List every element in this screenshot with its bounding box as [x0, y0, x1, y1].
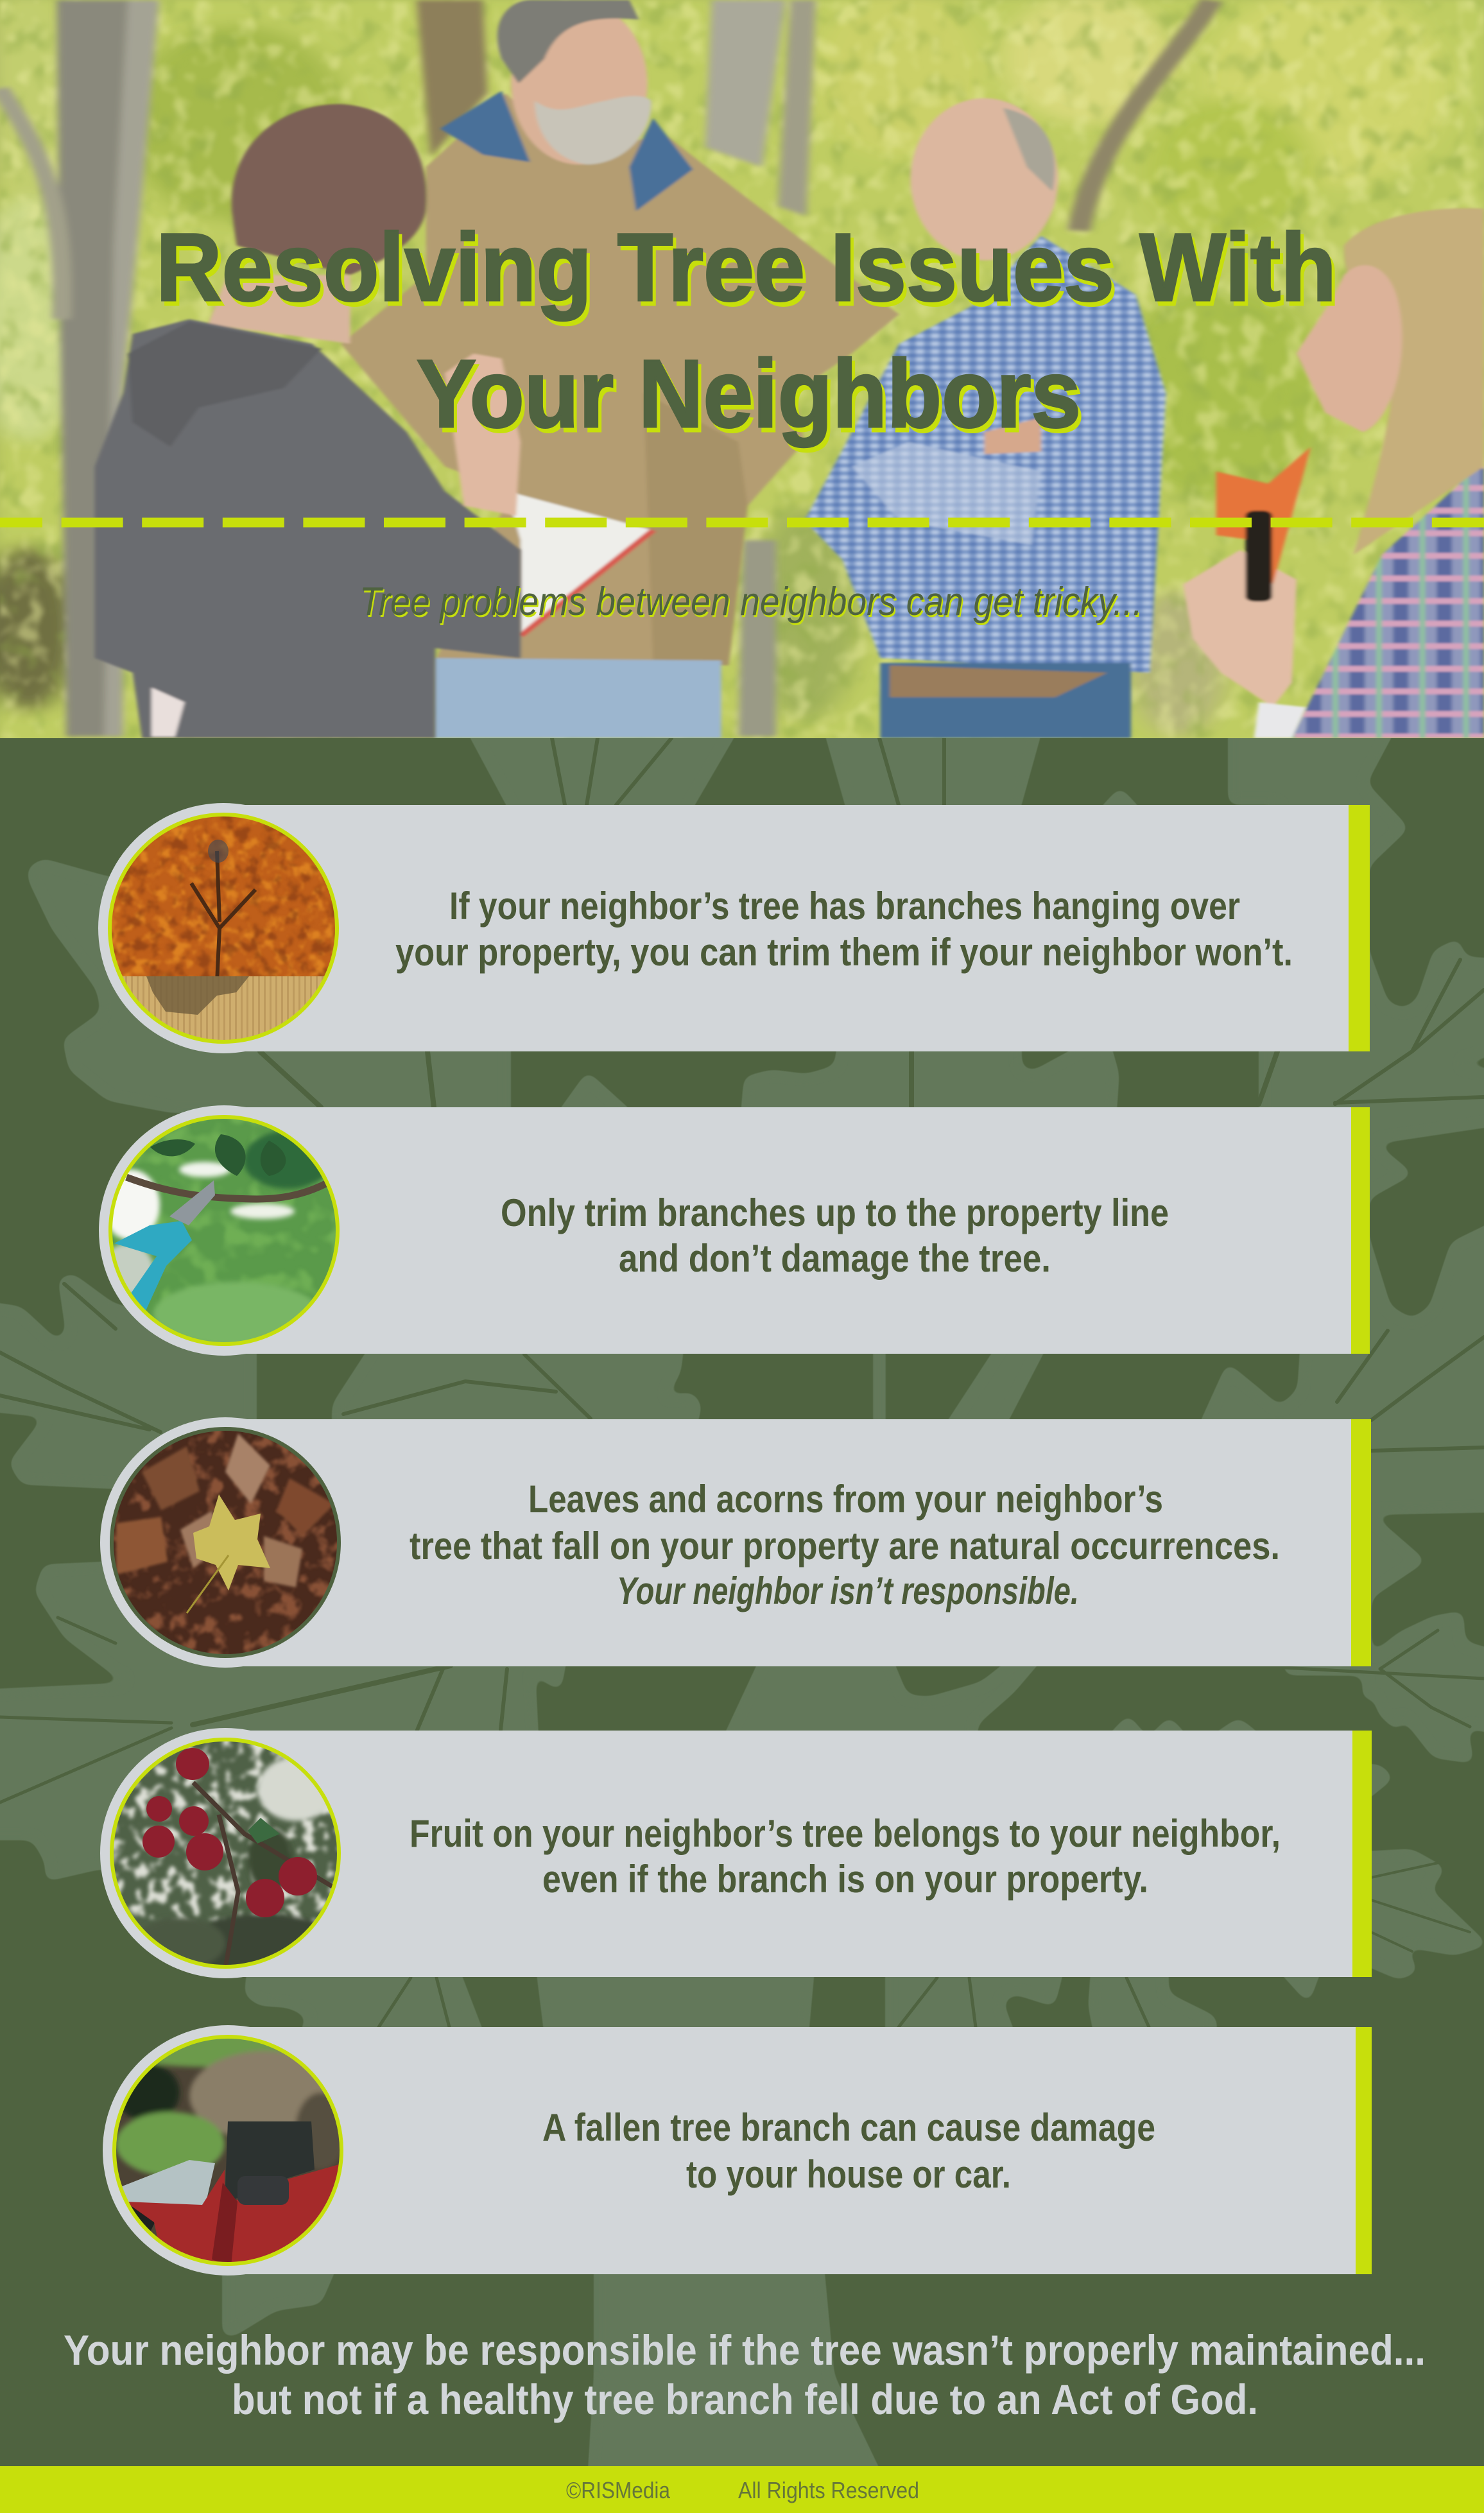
text: card 3: Your neighbor isn’t responsible. [617, 1569, 1079, 1612]
text: card 5: A fallen tree branch can cause damage [542, 2106, 1155, 2149]
title: Your Neighbors [417, 340, 1081, 447]
footer bar [0, 2466, 1484, 2513]
woman with plaid shirt and device [1183, 208, 1484, 738]
text: card 2: and don’t damage the tree. [619, 1237, 1051, 1280]
card 5: fallen branch [103, 2022, 1372, 2276]
text: card 4: Fruit on your neighbor’s tree belongs to your neighbor, [410, 1812, 1281, 1855]
subtitle: Tree problems between neighbors can get tricky... [359, 580, 1143, 624]
text: card 1: your property, you can trim them if your neighbor won’t. [395, 931, 1293, 974]
text: card 1: If your neighbor’s tree has branches hanging over [449, 885, 1240, 928]
photo: pruning shears [102, 1115, 340, 1346]
dashed divider [0, 517, 1484, 528]
card 3: leaves and acorns [100, 1417, 1371, 1668]
footer bar: All Rights Reserved [738, 2477, 919, 2503]
man in blue check shirt [804, 98, 1166, 738]
photo: tree fallen on red car [106, 2022, 347, 2266]
photo: autumn tree over fence [108, 813, 339, 1044]
text: card 4: even if the branch is on your property. [542, 1858, 1148, 1901]
header photo: neighbors talking among trees [0, 0, 1484, 756]
photo: red cherries [110, 1738, 347, 1985]
card 1: overhanging branches [98, 803, 1370, 1053]
woman in grey hoodie [94, 104, 521, 738]
photo: fallen leaves [110, 1427, 341, 1658]
tree trunks [0, 0, 1211, 737]
foliage texture [0, 0, 1484, 738]
text: card 3 [410, 1478, 1280, 1612]
text: card 1 [395, 885, 1293, 974]
card 2: trim to property line [99, 1105, 1370, 1356]
text: card 2: Only trim branches up to the property line [501, 1191, 1169, 1234]
man in tan jacket [341, 0, 899, 738]
text: card 5 [542, 2106, 1155, 2196]
foliage backdrop [0, 0, 1484, 756]
footer bar: ©RISMedia [566, 2477, 671, 2503]
text: card 2 [501, 1191, 1169, 1280]
closing statement [64, 2326, 1426, 2423]
text: card 5: to your house or car. [686, 2153, 1011, 2196]
card 4: fruit on the tree [100, 1728, 1372, 1985]
background tree and oak leaf pattern [0, 725, 1484, 2479]
text: card 3: tree that fall on your property are natural occurrences. [410, 1524, 1280, 1567]
text: card 3: Leaves and acorns from your neighbor’s [528, 1478, 1163, 1521]
text: card 4 [410, 1812, 1281, 1901]
title [156, 213, 1336, 447]
title: Resolving Tree Issues With [156, 213, 1336, 321]
closing statement: but not if a healthy tree branch fell due to an Act of God. [232, 2376, 1258, 2423]
